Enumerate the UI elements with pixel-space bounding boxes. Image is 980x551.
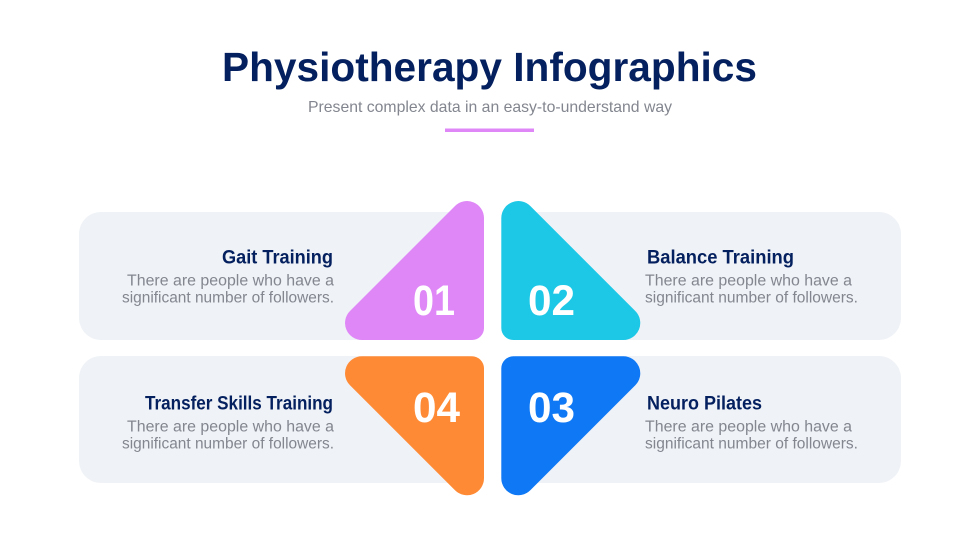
description: transfer skills training: significant number of followers. <box>122 436 334 452</box>
number 01: 01 <box>413 277 455 325</box>
number 04: 04 <box>413 384 460 432</box>
text block: neuro pilates <box>645 394 858 452</box>
heading: transfer skills training: Transfer Skills Training <box>145 394 333 414</box>
text block: gait training <box>122 248 334 306</box>
number 02: 02 <box>528 277 575 325</box>
panel: transfer skills training background <box>79 356 470 483</box>
heading: gait training: Gait Training <box>222 248 333 268</box>
description: transfer skills training <box>122 418 334 452</box>
panel: balance training background <box>515 212 901 340</box>
description: neuro pilates: There are people who have a <box>645 418 852 436</box>
description: gait training: There are people who have a <box>127 272 334 290</box>
triangle: 03 blue <box>501 356 640 495</box>
triangle: 02 cyan <box>501 201 640 340</box>
title: Physiotherapy Infographics <box>222 44 757 90</box>
panel: gait training background <box>79 212 470 340</box>
panel: neuro pilates background <box>515 356 901 483</box>
description: neuro pilates: significant number of followers. <box>645 436 858 452</box>
text block: balance training <box>645 248 858 306</box>
description: neuro pilates <box>645 418 858 452</box>
description: transfer skills training: There are people who have a <box>127 418 334 436</box>
text block: transfer skills training <box>122 394 334 452</box>
description: gait training <box>122 272 334 306</box>
description: balance training: There are people who have a <box>645 272 852 290</box>
description: balance training <box>645 272 858 306</box>
number 03: 03 <box>528 384 575 432</box>
title underline <box>445 128 534 132</box>
heading: neuro pilates: Neuro Pilates <box>647 394 762 414</box>
triangle: 04 orange <box>345 356 484 495</box>
description: gait training: significant number of followers. <box>122 290 334 306</box>
description: balance training: significant number of followers. <box>645 290 858 306</box>
subtitle: Present complex data in an easy-to-understand way <box>308 99 672 116</box>
triangle: 01 purple <box>345 201 484 340</box>
heading: balance training: Balance Training <box>647 248 794 268</box>
